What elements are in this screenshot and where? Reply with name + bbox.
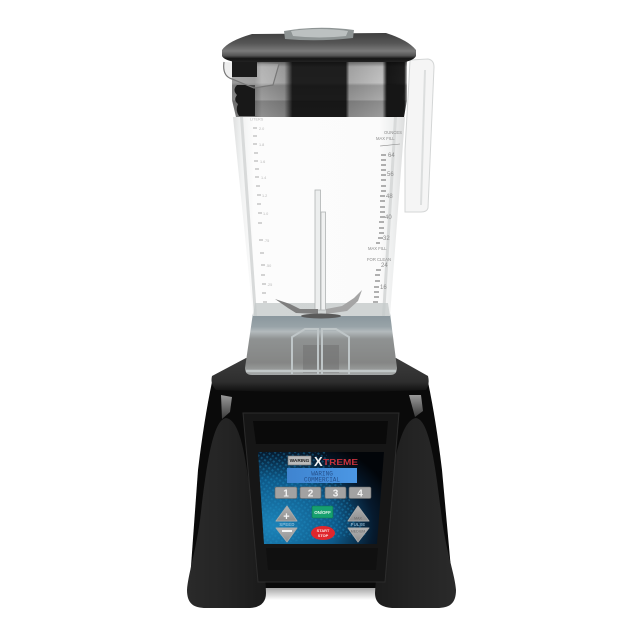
control housing <box>243 413 399 582</box>
left blade <box>275 299 318 314</box>
shadow under base <box>262 586 378 600</box>
lid cap <box>284 28 354 40</box>
preset buttons: 4 <box>357 488 363 500</box>
LCD display <box>287 468 357 484</box>
jar right wall <box>382 117 397 316</box>
gasket right <box>387 85 404 116</box>
left scale: 1.2 <box>262 194 267 198</box>
left scale: 1.0 <box>263 212 268 216</box>
right scale heading: MAX FILL <box>376 136 395 141</box>
LCD display: WARING <box>311 470 333 478</box>
preset buttons: 3 <box>333 488 339 500</box>
right blade <box>326 290 362 314</box>
speed up button: + <box>283 511 290 523</box>
left scale: 1.6 <box>260 160 265 164</box>
left scale: 1.4 <box>261 176 266 180</box>
jar collar <box>232 60 407 117</box>
right scale: 56 <box>387 172 394 178</box>
tall spindle <box>315 190 320 310</box>
left foot <box>187 418 266 608</box>
start/stop button: START <box>317 528 330 533</box>
housing frame <box>243 413 399 582</box>
preset buttons: 2 <box>308 488 314 500</box>
max fill clean label: FOR CLEAN <box>367 257 391 262</box>
max fill clean label <box>367 246 391 262</box>
panel hatch <box>258 452 368 544</box>
max fill clean label: MAX FILL <box>368 246 387 251</box>
control panel <box>258 452 384 544</box>
pad bottom rim <box>246 370 396 372</box>
right scale ticks <box>373 155 386 302</box>
right scale heading <box>376 130 402 141</box>
lower recess <box>266 548 378 570</box>
base left highlight <box>221 395 232 419</box>
right scale heading: OUNCES <box>384 130 402 135</box>
blender base <box>187 358 456 608</box>
pulse down button: MEDIUM <box>351 530 365 534</box>
pulse label: PULSE <box>351 522 365 527</box>
right scale: 40 <box>385 215 392 221</box>
Xtreme logo <box>314 454 358 469</box>
right scale <box>367 130 402 302</box>
pulse up button: MAX <box>354 516 362 520</box>
left scale: .50 <box>266 264 271 268</box>
jar body <box>233 117 405 316</box>
top plate <box>212 358 429 392</box>
base body <box>190 382 452 588</box>
speed label: SPEED <box>279 522 295 527</box>
short spindle <box>321 212 326 310</box>
pad ribs <box>292 329 349 374</box>
jar left wall <box>240 117 257 316</box>
container pad <box>245 313 397 375</box>
lid clip <box>224 60 279 88</box>
blender lid <box>222 28 416 62</box>
jar handle <box>405 59 434 212</box>
preset buttons <box>275 487 371 500</box>
base right highlight <box>409 395 423 417</box>
on/off button: ON/OFF <box>314 510 331 515</box>
right scale: 48 <box>386 194 393 200</box>
Waring logo: WARING <box>290 458 310 464</box>
panel screen <box>258 452 384 544</box>
left scale: .25 <box>267 283 272 287</box>
upper recess <box>253 421 388 444</box>
left scale: LITERS <box>250 118 264 122</box>
left scale <box>250 118 272 302</box>
left scale: 2.0 <box>259 127 264 131</box>
blade assembly <box>275 190 362 318</box>
start/stop button <box>311 526 335 540</box>
start/stop button: STOP <box>318 533 329 538</box>
left scale: 1.8 <box>259 143 264 147</box>
right scale: 32 <box>383 236 390 242</box>
right foot <box>375 418 456 608</box>
left scale: .75 <box>264 239 269 243</box>
collar bands <box>232 60 407 117</box>
LCD display: COMMERCIAL <box>304 476 340 484</box>
right scale: 64 <box>388 153 395 159</box>
gasket left <box>234 85 255 116</box>
right scale: 16 <box>380 285 387 291</box>
preset buttons: 1 <box>283 488 289 500</box>
speed down button <box>276 528 297 542</box>
right scale: 24 <box>381 263 388 269</box>
blade hub <box>301 314 341 318</box>
jar floor <box>253 303 390 316</box>
Xtreme logo: X <box>314 454 323 469</box>
pad body <box>245 313 397 375</box>
Xtreme logo: TREME <box>323 457 358 467</box>
pad center shadow <box>303 345 339 373</box>
